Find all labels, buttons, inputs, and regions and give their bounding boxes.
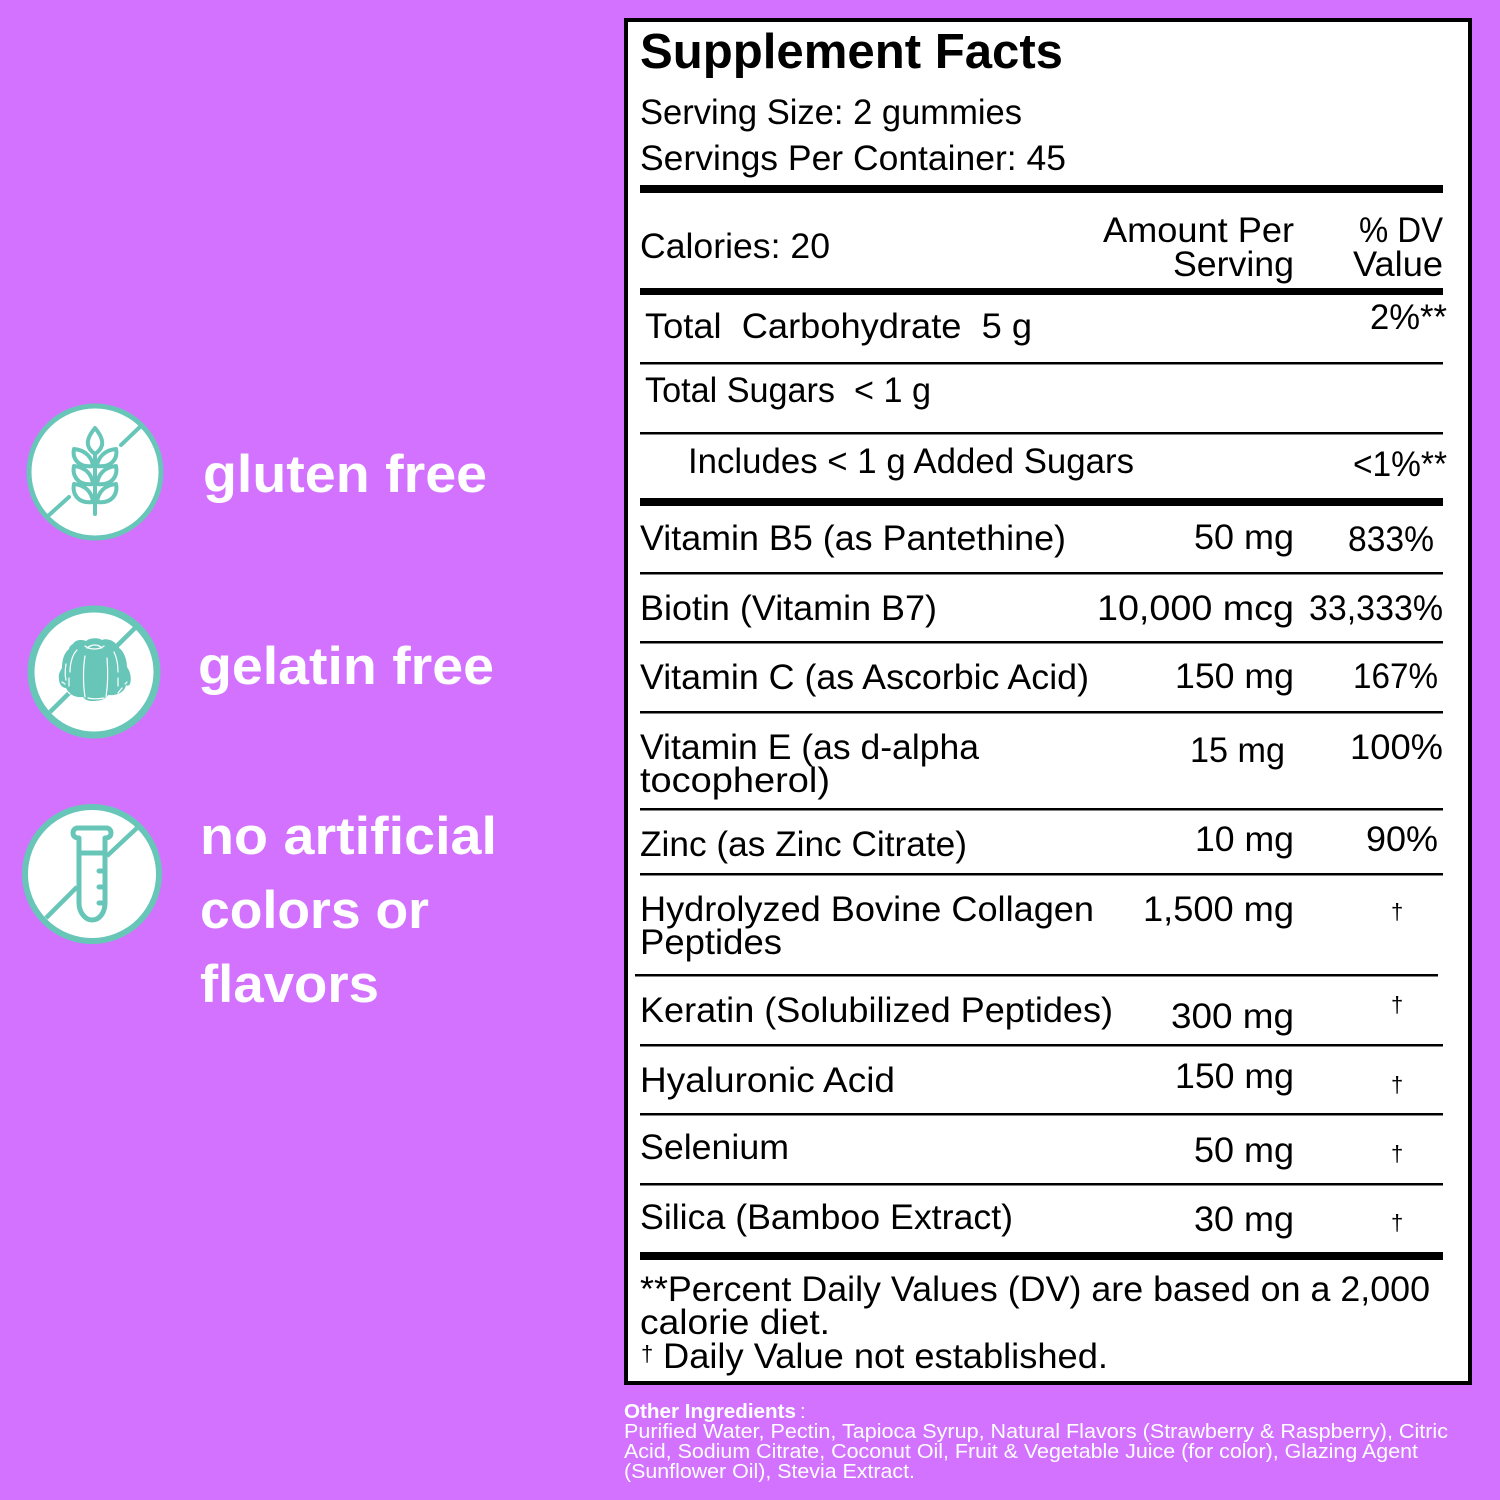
row: total carbohydrate: Total Carbohydrate 5 g — [645, 307, 1032, 346]
row: biotin — [640, 589, 1443, 628]
row: total sugars: Total Sugars < 1 g — [645, 371, 931, 410]
row: hyaluronic acid — [640, 1057, 1403, 1100]
text: footnotes: † — [641, 1341, 653, 1366]
row: silica: 30 mg — [1194, 1200, 1294, 1239]
row: vitamin C: 150 mg — [1175, 657, 1294, 696]
row: calories and column headings: % DV — [1359, 211, 1444, 250]
row: hyaluronic acid: 150 mg — [1175, 1057, 1294, 1096]
row: calories and column headings — [640, 211, 1444, 284]
text: other ingredients: Purified Water, Pectin, Tapioca Syrup, Natural Flavors (Strawberry & Raspberry), Citric — [624, 1421, 1448, 1443]
row: keratin: † — [1391, 992, 1403, 1017]
row: added sugars: Includes < 1 g Added Sugars — [688, 442, 1134, 481]
row: hyaluronic acid: † — [1391, 1072, 1403, 1097]
text: serving information — [640, 93, 1066, 178]
row: calories and column headings: Value — [1353, 245, 1443, 284]
row: hydrolyzed bovine collagen: † — [1391, 899, 1403, 924]
row: hydrolyzed bovine collagen: 1,500 mg — [1143, 890, 1294, 929]
heading: Supplement Facts: Supplement Facts — [640, 25, 1063, 79]
row: vitamin C: Vitamin C (as Ascorbic Acid) — [640, 658, 1089, 697]
text: other ingredients: : — [800, 1401, 806, 1423]
row: silica — [640, 1198, 1403, 1239]
row: vitamin B5: 50 mg — [1194, 518, 1294, 557]
text: footnotes: **Percent Daily Values (DV) are based on a 2,000 — [640, 1270, 1430, 1309]
row: hydrolyzed bovine collagen — [640, 890, 1403, 962]
text: other ingredients: Other Ingredients — [624, 1401, 796, 1423]
row: zinc: 10 mg — [1195, 820, 1294, 859]
row: keratin — [640, 991, 1403, 1036]
row: total carbohydrate — [645, 298, 1447, 346]
label: no artificial colors or flavors: flavors — [200, 955, 379, 1014]
row: biotin: 33,333% — [1309, 589, 1443, 628]
row: keratin: Keratin (Solubilized Peptides) — [640, 991, 1113, 1030]
panel: supplement facts — [626, 20, 1470, 1383]
icon: gelatin free jelly mold — [31, 609, 157, 735]
icon: gluten free wheat — [29, 406, 161, 538]
row: calories and column headings: Amount Per — [1103, 211, 1294, 250]
divider: thick section rule — [640, 498, 1443, 506]
label: no artificial colors or flavors: no artificial — [200, 807, 497, 866]
text: serving information: Servings Per Container: 45 — [640, 139, 1066, 178]
row: total carbohydrate: 2%** — [1370, 298, 1447, 337]
row: vitamin E: Vitamin E (as d-alpha — [640, 728, 980, 767]
label: gluten free: gluten free — [203, 445, 487, 504]
row: added sugars — [688, 442, 1447, 484]
text: serving information: Serving Size: 2 gummies — [640, 93, 1022, 132]
row: vitamin E: 100% — [1350, 728, 1443, 767]
row: selenium: 50 mg — [1194, 1131, 1294, 1170]
row: vitamin B5: Vitamin B5 (as Pantethine) — [640, 519, 1066, 558]
row: vitamin E: tocopherol) — [640, 761, 830, 800]
row: calories and column headings: Serving — [1173, 245, 1294, 284]
row: silica: Silica (Bamboo Extract) — [640, 1198, 1013, 1237]
row: hydrolyzed bovine collagen: Hydrolyzed Bovine Collagen — [640, 890, 1094, 929]
text: other ingredients: Acid, Sodium Citrate, Coconut Oil, Fruit & Vegetable Juice (for color), Glazing Agent — [624, 1441, 1418, 1463]
row: selenium: † — [1391, 1141, 1403, 1166]
text: other ingredients — [624, 1401, 1448, 1483]
text: other ingredients: (Sunflower Oil), Stevia Extract. — [624, 1461, 915, 1483]
label: no artificial colors or flavors — [200, 807, 497, 1014]
row: silica: † — [1391, 1210, 1403, 1235]
label: gelatin free: gelatin free — [198, 637, 494, 696]
row: zinc — [640, 820, 1438, 864]
text: footnotes: Daily Value not established. — [663, 1337, 1108, 1376]
row: vitamin C: 167% — [1353, 657, 1438, 696]
icon: no artificial test tube — [25, 807, 159, 941]
row: vitamin B5: 833% — [1348, 520, 1434, 559]
divider: thick footer rule — [640, 1252, 1443, 1260]
divider: thick serving rule — [640, 185, 1443, 193]
text: footnotes: calorie diet. — [640, 1303, 830, 1342]
row: selenium — [640, 1128, 1403, 1170]
row: selenium: Selenium — [640, 1128, 789, 1167]
row: biotin: Biotin (Vitamin B7) — [640, 589, 937, 628]
row: keratin: 300 mg — [1171, 997, 1294, 1036]
divider: thick header rule — [640, 288, 1443, 295]
row: vitamin E — [640, 728, 1443, 800]
label: no artificial colors or flavors: colors or — [200, 881, 429, 940]
row: vitamin B5 — [640, 518, 1434, 559]
row: hyaluronic acid: Hyaluronic Acid — [640, 1061, 895, 1100]
row: zinc: 90% — [1366, 820, 1438, 859]
row: added sugars: <1%** — [1353, 445, 1447, 484]
row: zinc: Zinc (as Zinc Citrate) — [640, 825, 967, 864]
row: hydrolyzed bovine collagen: Peptides — [640, 923, 782, 962]
row: vitamin E: 15 mg — [1190, 731, 1285, 770]
row: vitamin C — [640, 657, 1438, 697]
row: biotin: 10,000 mcg — [1097, 589, 1294, 628]
text: footnotes — [640, 1270, 1430, 1376]
row: calories and column headings: Calories: 20 — [640, 227, 830, 266]
